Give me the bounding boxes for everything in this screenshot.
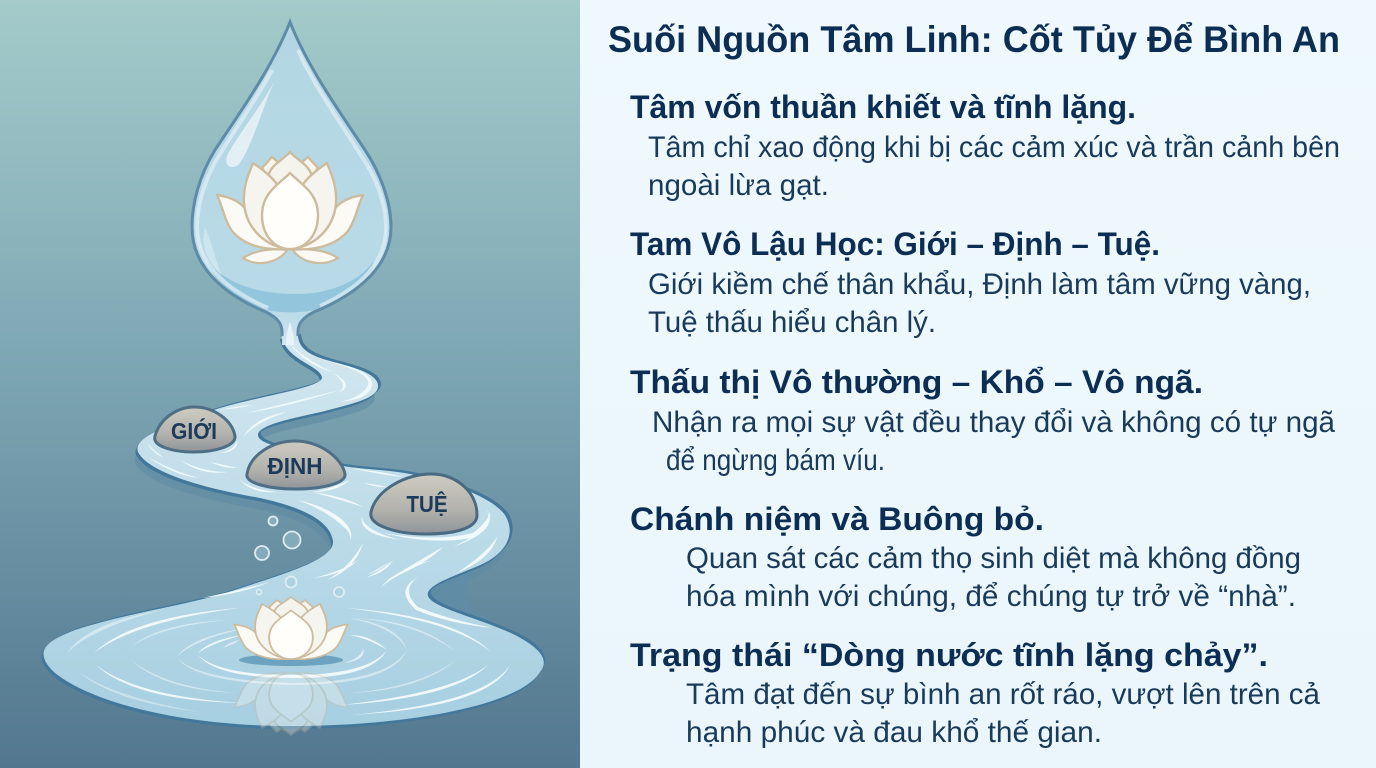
pond ripples	[67, 608, 510, 715]
bubbles	[255, 516, 344, 597]
point 5: hạnh phúc và đau khổ thế gian.	[686, 716, 1102, 749]
point 4	[630, 501, 1301, 613]
stream highlights	[147, 345, 497, 628]
point 4: hóa mình với chúng, để chúng tự trở về “nhà”.	[686, 580, 1296, 613]
point 5: Tâm đạt đến sự bình an rốt ráo, vượt lên trên cả	[686, 678, 1320, 711]
title: Suối Nguồn Tâm Linh: Cốt Tủy Để Bình An	[608, 19, 1340, 60]
point 2: Tam Vô Lậu Học: Giới – Định – Tuệ.	[630, 226, 1160, 262]
point 3	[630, 364, 1335, 477]
right text panel	[580, 0, 1376, 768]
stone: ĐỊNH	[247, 441, 345, 489]
point 5: Trạng thái “Dòng nước tĩnh lặng chảy”.	[630, 637, 1268, 673]
point 4: Quan sát các cảm thọ sinh diệt mà không đồng	[686, 542, 1301, 575]
point 4: Chánh niệm và Buông bỏ.	[630, 501, 1044, 537]
stone: GIỚI	[155, 407, 235, 452]
lotus inside drop	[217, 152, 363, 304]
stone: TUỆ	[371, 474, 477, 534]
point 2: Giới kiềm chế thân khẩu, Định làm tâm vững vàng,	[648, 268, 1311, 301]
point 1: Tâm chỉ xao động khi bị các cảm xúc và trần cảnh bên	[648, 131, 1340, 164]
floating lotus	[234, 597, 348, 666]
point 2: Tuệ thấu hiểu chân lý.	[648, 306, 936, 339]
point 5	[630, 637, 1320, 749]
point 3: để ngừng bám víu.	[666, 444, 885, 477]
stone: TUỆ: TUỆ	[406, 490, 448, 517]
lotus reflection	[234, 673, 348, 735]
point 3: Thấu thị Vô thường – Khổ – Vô ngã.	[630, 364, 1203, 400]
point 1: Tâm vốn thuần khiết và tĩnh lặng.	[630, 89, 1136, 125]
stone: GIỚI: GIỚI	[171, 417, 217, 444]
water drop	[192, 22, 391, 345]
stone: ĐỊNH: ĐỊNH	[268, 453, 322, 479]
point 3: Nhận ra mọi sự vật đều thay đổi và không có tự ngã	[652, 406, 1335, 439]
point 1	[630, 89, 1340, 202]
point 2	[630, 226, 1311, 339]
stream and pond	[41, 334, 545, 737]
point 1: ngoài lừa gạt.	[648, 169, 829, 202]
left illustration panel	[0, 0, 580, 768]
